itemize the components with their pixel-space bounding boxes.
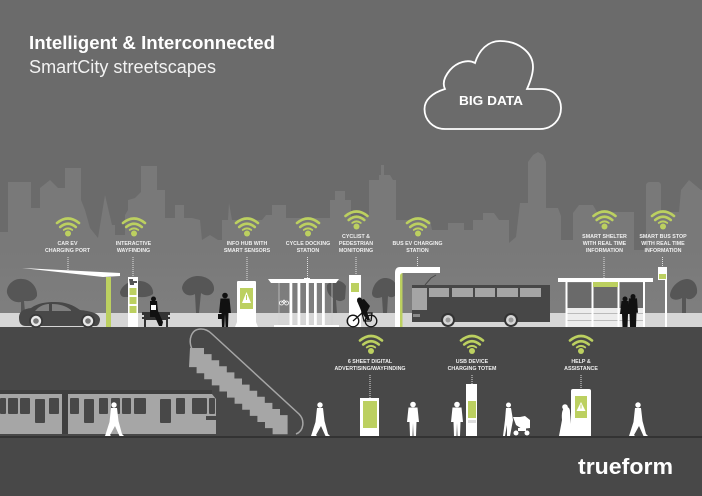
wifi and label: info hub: SMART SENSORS [224, 248, 271, 254]
bus EV charger [395, 267, 440, 327]
trueform logo: trueform [578, 454, 673, 479]
info hub [235, 281, 258, 327]
wifi and label: smart bus stop [639, 212, 687, 267]
big data cloud [424, 41, 561, 129]
wifi and label: smart shelter: INFORMATION [586, 248, 623, 254]
wifi and label: interactive wayfinding: WAYFINDING [117, 248, 150, 254]
cycle docking station [268, 278, 339, 327]
train [0, 390, 216, 434]
car EV charger [22, 268, 120, 327]
wifi and label: smart bus stop: INFORMATION [645, 248, 682, 254]
cyclist [347, 298, 377, 327]
wifi and label: 6 sheet digital advertising: 6 SHEET DIGITAL [348, 359, 393, 365]
help and assistance point [571, 389, 591, 436]
smart shelter [558, 278, 653, 327]
wifi and label: cycle docking station: CYCLE DOCKING [286, 241, 330, 247]
underground pedestrians [105, 402, 648, 436]
advertising totem [360, 398, 379, 436]
sky background [0, 0, 702, 330]
wifi and label: help and assistance: HELP & [571, 359, 591, 365]
wifi and label: bus EV charging station [392, 218, 443, 267]
wifi and label: car EV charging port [45, 218, 91, 270]
wifi and label: smart shelter: SMART SHELTER [582, 234, 627, 240]
underground level [0, 327, 702, 496]
wifi and label: info hub: INFO HUB WITH [227, 241, 267, 247]
pavement [0, 313, 702, 327]
wifi and label: cycle docking station: STATION [297, 248, 319, 254]
wifi and label: smart bus stop: SMART BUS STOP [639, 234, 687, 240]
wifi and label: interactive wayfinding [116, 218, 152, 277]
man with bag [218, 293, 231, 327]
wifi and label: help and assistance [564, 336, 598, 389]
woman with stroller [503, 402, 530, 436]
cyclist and pedestrian monitoring post [349, 275, 361, 327]
wifi and label: cycle docking station [286, 218, 330, 278]
wifi and label: smart bus stop: WITH REAL TIME [641, 241, 685, 247]
wifi and label: cyclist and pedestrian monitoring: CYCLIST & [342, 234, 370, 240]
wifi and label: USB device charging totem: CHARGING TOTEM [448, 366, 497, 372]
underground floor line [0, 436, 702, 438]
wifi and label: cyclist and pedestrian monitoring: PEDESTRIAN [339, 241, 373, 247]
street trees [7, 276, 697, 313]
wifi and label: smart shelter: WITH REAL TIME [583, 241, 627, 247]
wifi and label: cyclist and pedestrian monitoring: MONITORING [339, 248, 373, 254]
wifi and label: 6 sheet digital advertising [334, 336, 406, 398]
low haze below skyline [0, 250, 702, 330]
smart bus stop [658, 267, 667, 327]
title: Intelligent & Interconnected [29, 33, 275, 53]
wifi and label: smart shelter [582, 212, 627, 278]
wifi and label: car EV charging port: CHARGING PORT [45, 248, 91, 254]
car [19, 302, 100, 328]
skyline [0, 152, 702, 320]
big data cloud: BIG DATA [459, 93, 524, 108]
wifi and label: bus EV charging station: STATION [406, 248, 429, 254]
wifi and label: USB device charging totem: USB DEVICE [456, 359, 489, 365]
wifi and label: 6 sheet digital advertising: ADVERTISING/WAYFINDING [334, 366, 406, 372]
wifi and label: bus EV charging station: BUS EV CHARGING [392, 241, 443, 247]
subtitle: SmartCity streetscapes [29, 57, 216, 77]
escalator [189, 329, 303, 434]
bus [412, 275, 550, 327]
USB charging totem [466, 384, 477, 436]
wifi and label: cyclist and pedestrian monitoring [339, 212, 373, 275]
wifi and label: info hub [224, 218, 271, 281]
wifi and label: help and assistance: ASSISTANCE [564, 366, 598, 372]
wifi and label: USB device charging totem [448, 336, 497, 384]
interactive wayfinding kiosk [128, 277, 138, 327]
wifi and label: interactive wayfinding: INTERACTIVE [116, 241, 152, 247]
waiting couple [620, 294, 638, 327]
bench with seated person [142, 296, 170, 327]
wifi and label: car EV charging port: CAR EV [57, 241, 78, 247]
